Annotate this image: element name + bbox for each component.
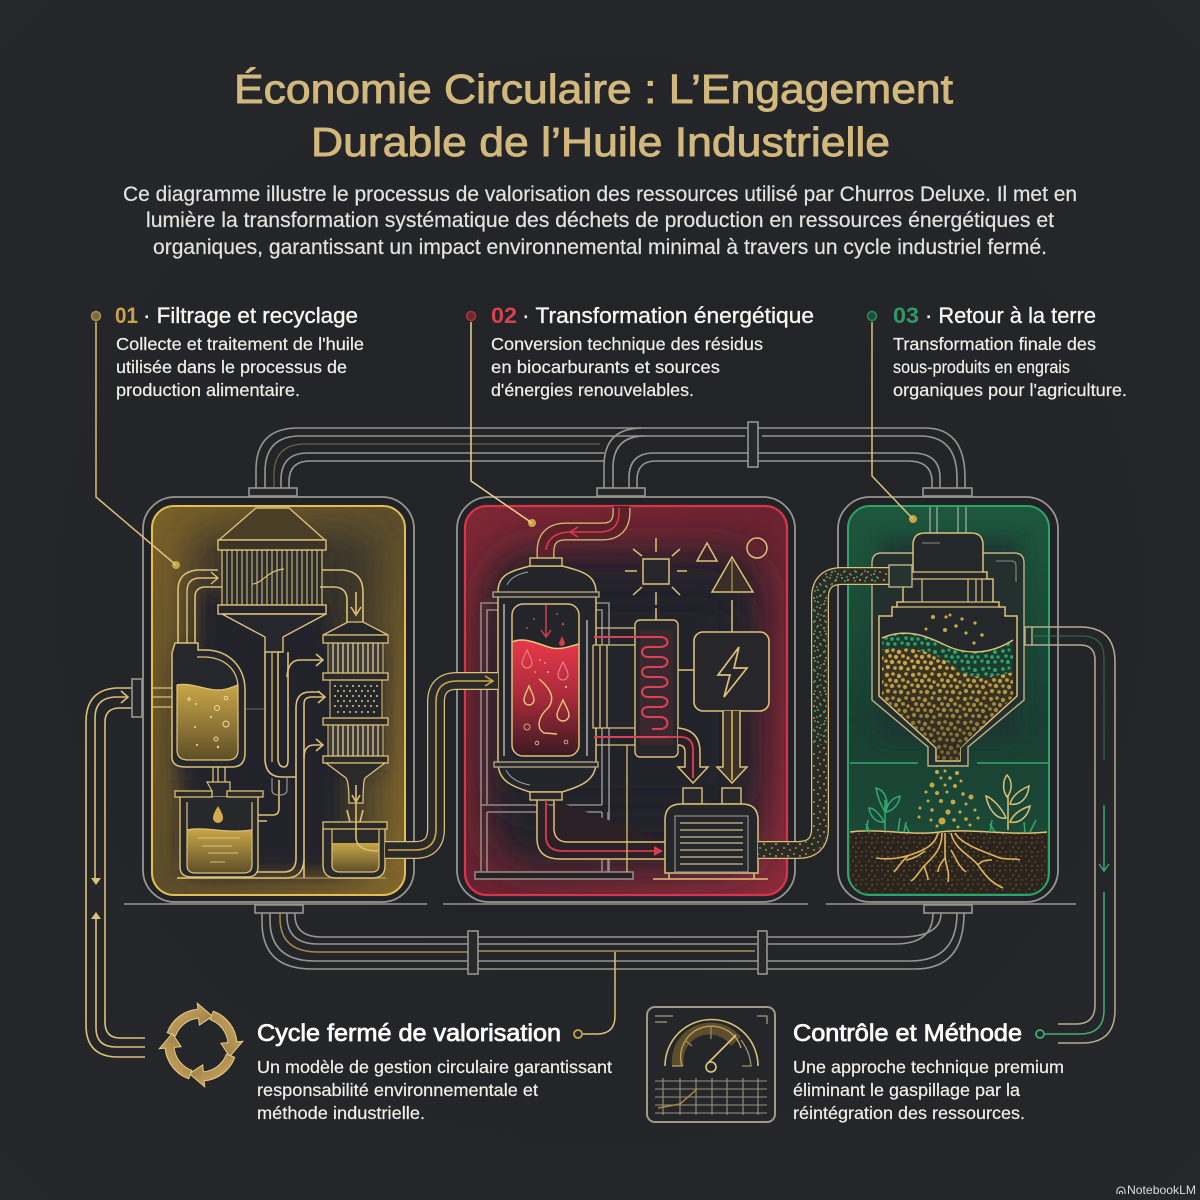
renewable energy symbols [625,538,767,632]
section 01: production alimentaire. [116,380,300,400]
section 02: en biocarburants et sources [491,357,720,377]
intro text: organiques, garantissant un impact environnemental minimal à travers un cycle industriel fermé. [153,236,1047,259]
right filter column [323,622,388,803]
marker dot [172,561,180,569]
section 03: sous-produits en engrais [893,357,1070,377]
section 03: organiques pour l'agriculture. [893,380,1127,400]
marker dot [528,519,536,527]
section 03: · Retour à la terre [925,303,1096,328]
mid divider [850,762,1048,764]
section 01: · Filtrage et recyclage [143,303,358,328]
intro text [123,183,1077,259]
lower right beaker [177,803,387,878]
intro text: lumière la transformation systématique des déchets de production en ressources énergétiques et [146,209,1054,232]
pipe: filter to reactor [385,676,498,850]
panel: retour a la terre [838,497,1058,902]
notebooklm badge: NotebookLM [1127,1183,1196,1197]
text: cycle ferme: responsabilité environnementale et [257,1080,538,1100]
section 01: 01 [115,303,138,328]
icon: recycling arrows [159,1003,243,1087]
title: Économie Circulaire : L’Engagement [234,66,954,112]
section 02 [466,303,814,400]
text: controle et methode: éliminant le gaspillage par la [793,1080,1020,1100]
section 01: Collecte et traitement de l'huile [116,334,364,354]
text: cycle ferme: Un modèle de gestion circulaire garantissant [257,1057,612,1077]
intro text: Ce diagramme illustre le processus de valorisation des ressources utilisé par Churros Deluxe. Il met en [123,183,1077,206]
panel: transformation energetique [457,497,795,902]
text: controle et methode: réintégration des ressources. [793,1103,1025,1123]
marker dot [909,515,917,523]
power box with lightning bolt [678,632,769,783]
section 01: utilisée dans le processus de [116,357,347,377]
text: controle et methode: Contrôle et Méthode [793,1020,1022,1047]
section 03 [868,303,1127,400]
section 03: Transformation finale des [893,334,1096,354]
pipe: return to start [86,679,145,1057]
section 02: Conversion technique des résidus [491,334,763,354]
soil with roots [850,831,1047,893]
text: controle et methode [793,1020,1064,1123]
leader lines [96,322,913,1038]
section 02: · Transformation énergétique [522,303,814,328]
section 02: 02 [491,303,517,328]
pipe: hopper to control [1025,627,1115,1043]
title [234,66,954,165]
lower left beaker [175,782,263,877]
panel: filtrage [143,497,414,902]
digester hopper [872,506,1024,766]
reactor inlet pipe [546,506,622,558]
plants [866,775,1036,832]
feed pipes [177,570,363,878]
title: Durable de l’Huile Industrielle [311,119,890,165]
text: controle et methode: Une approche technique premium [793,1057,1064,1077]
top connecting pipes [249,422,972,496]
battery unit [537,745,768,879]
pipe: battery to hopper with granules [758,565,912,850]
section 03: 03 [893,303,919,328]
top filter [218,508,326,652]
heat exchanger coil [593,620,708,783]
support frame [475,603,633,879]
bottom connecting pipes [124,904,1076,974]
falling granules [918,770,980,828]
reactor vessel [493,558,599,800]
section 01 [92,303,364,400]
text: cycle ferme: Cycle fermé de valorisation [257,1020,561,1047]
text: cycle ferme [257,1020,612,1123]
icon: gauge panel [647,1007,775,1122]
left tank with oil [152,643,245,782]
text: cycle ferme: méthode industrielle. [257,1103,425,1123]
section 02: d'énergies renouvelables. [491,380,694,400]
